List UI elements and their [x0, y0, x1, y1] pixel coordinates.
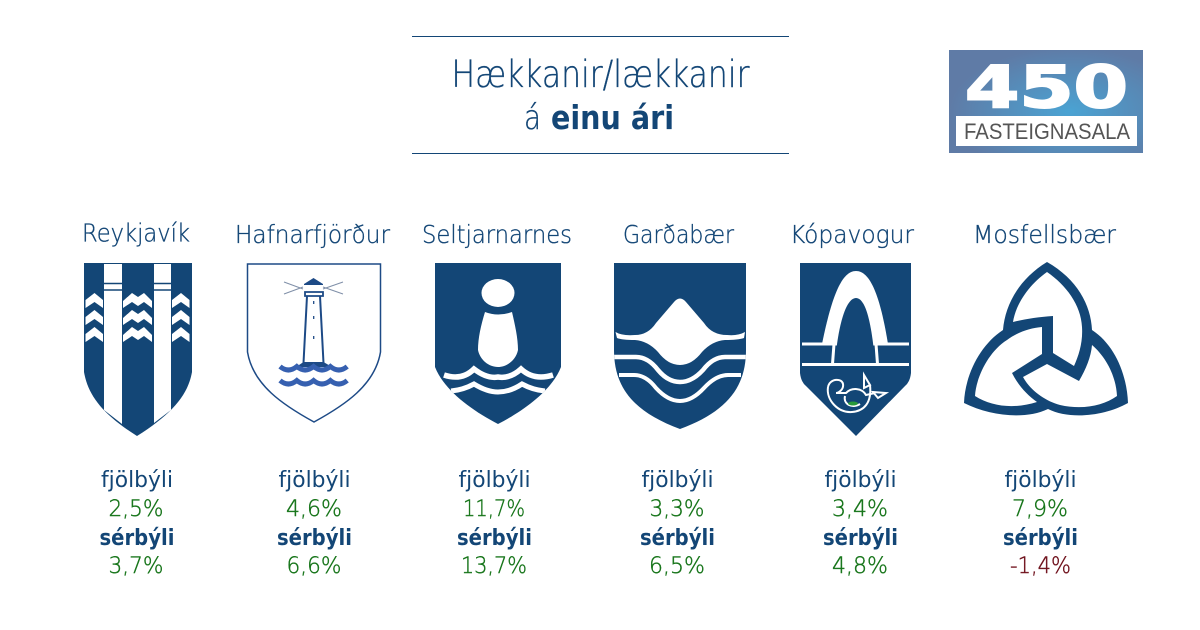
icon: Garðabær shield [612, 263, 748, 429]
stats: 3,3% [650, 497, 704, 522]
icon: fish emblem [828, 375, 886, 412]
stats: 3,4% [832, 497, 888, 522]
label: Reykjavík [82, 218, 190, 248]
column: Kópavogur [790, 220, 915, 579]
stats: 6,5% [649, 554, 705, 579]
stats: sérbýli [640, 526, 715, 551]
stats: 3,7% [108, 554, 164, 579]
title line 2: á [524, 98, 541, 138]
column: Mosfellsbær [964, 220, 1128, 579]
stats: 13,7% [461, 554, 527, 579]
stats: 2,5% [108, 497, 164, 522]
icon: Hafnarfjörður lighthouse shield [248, 264, 380, 422]
stats: sérbýli [823, 526, 898, 551]
label: Kópavogur [790, 220, 915, 249]
title line 1: Hækkanir/lækkanir [452, 53, 750, 96]
stats [1003, 468, 1078, 579]
stats: sérbýli [277, 526, 352, 551]
stats: fjölbýli [642, 468, 714, 493]
stats: sérbýli [100, 526, 174, 551]
icon: Seltjarnarnes shield [435, 263, 561, 424]
stats [823, 468, 898, 579]
icon: Kópavogur shield [800, 263, 911, 436]
icon: Mosfellsbær triquetra [964, 262, 1128, 415]
stats [457, 468, 532, 579]
column: Hafnarfjörður [235, 220, 391, 579]
column: Reykjavík [82, 218, 192, 579]
stats: 4,8% [832, 554, 888, 579]
stats: sérbýli [1003, 526, 1078, 551]
stats [100, 468, 174, 579]
column: Seltjarnarnes [422, 220, 572, 579]
stats: -1,4% [1010, 554, 1071, 579]
stats: fjölbýli [101, 468, 173, 493]
stats: fjölbýli [278, 468, 350, 493]
logo: 450 fasteignasala: FASTEIGNASALA [964, 119, 1130, 144]
stats: 4,6% [286, 497, 342, 522]
label: Garðabær [623, 220, 735, 249]
title block [412, 36, 789, 154]
label: Hafnarfjörður [235, 220, 391, 249]
stats: 6,6% [286, 554, 342, 579]
icon: Reykjavík shield [84, 263, 192, 436]
label: Seltjarnarnes [422, 220, 572, 249]
stats: fjölbýli [1004, 468, 1076, 493]
stats: 7,9% [1012, 497, 1068, 522]
logo: 450 fasteignasala: 450 [965, 53, 1128, 121]
stats [277, 468, 352, 579]
label: Mosfellsbær [973, 220, 1117, 249]
title line 2: einu ári [551, 98, 674, 137]
column: Garðabær [612, 220, 748, 579]
stats: fjölbýli [458, 468, 530, 493]
stats: 11,7% [463, 497, 525, 522]
stats: fjölbýli [824, 468, 896, 493]
stats: sérbýli [457, 526, 532, 551]
stats [640, 468, 715, 579]
logo: 450 fasteignasala [949, 50, 1143, 153]
